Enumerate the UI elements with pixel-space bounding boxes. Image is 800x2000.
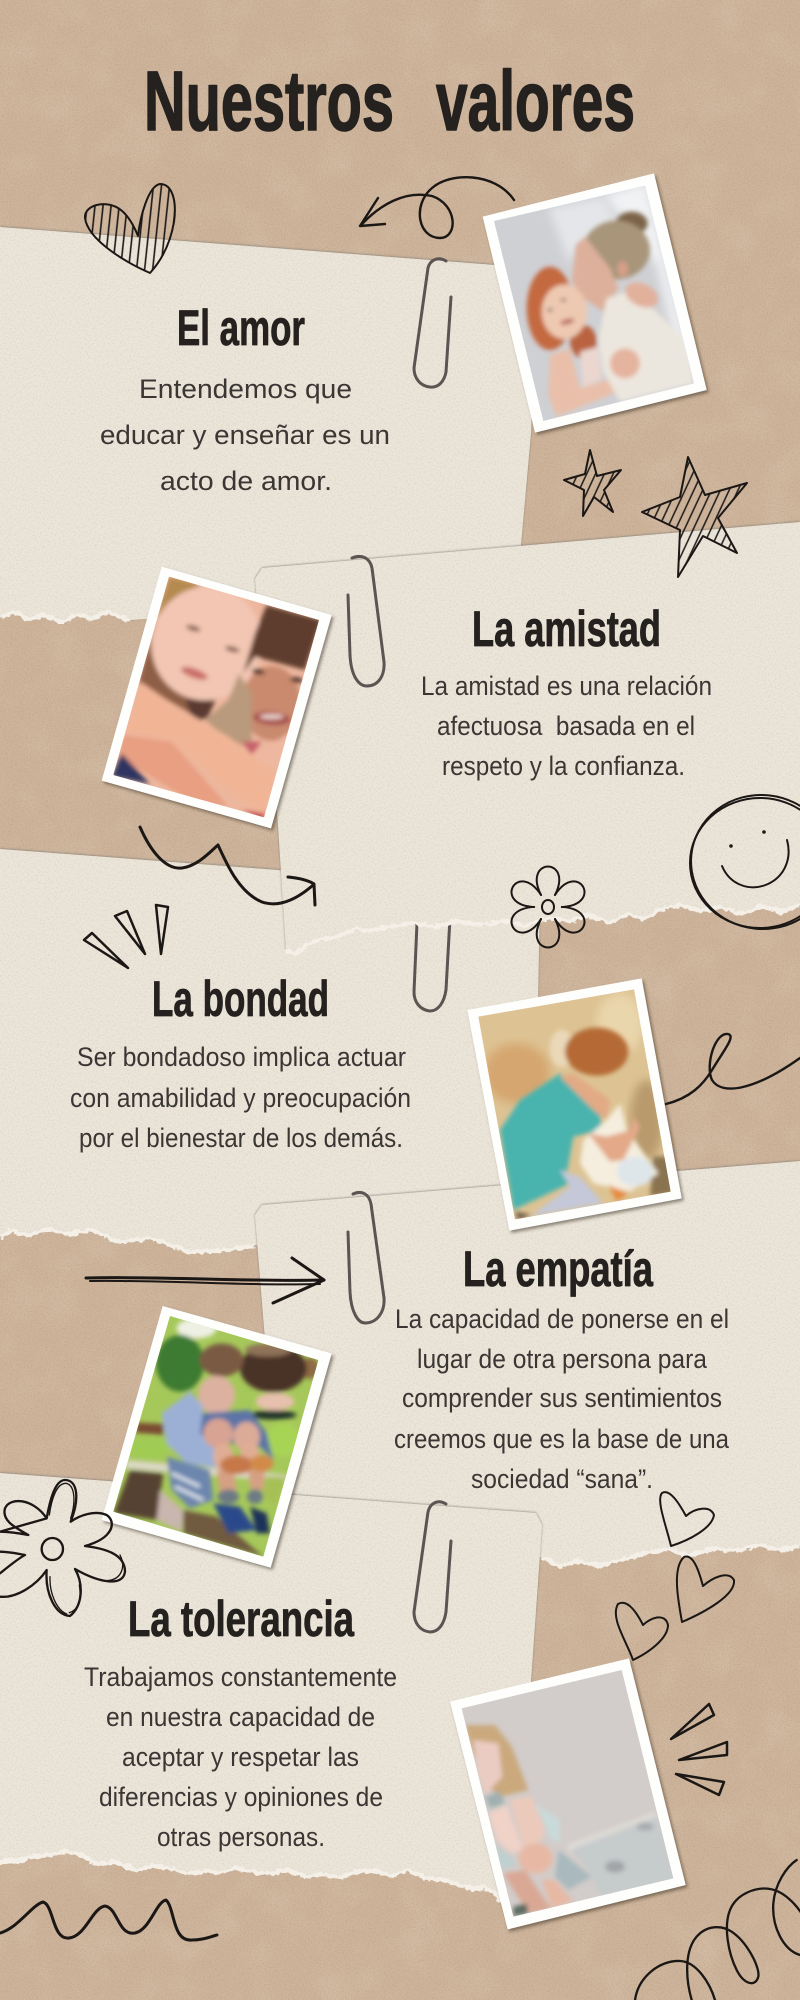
- icon: outline heart lower: [616, 1603, 668, 1660]
- text: la amistad: afectuosa basada en el: [437, 711, 695, 741]
- text: la tolerancia: Trabajamos constantemente: [84, 1662, 397, 1692]
- panel: el amor: [0, 227, 537, 700]
- icon: small star: [564, 450, 621, 516]
- text: la tolerancia: en nuestra capacidad de: [106, 1702, 375, 1732]
- icon: paperclip: [414, 900, 451, 1011]
- arrow: straight pointing to clip: [86, 1258, 324, 1303]
- panel: la empatía: [255, 1161, 800, 1600]
- text: el amor: acto de amor.: [160, 466, 332, 496]
- icon: paperclip: [414, 259, 451, 387]
- photo: children embracing in a field: [467, 978, 682, 1231]
- text: la tolerancia: aceptar y respetar las: [122, 1742, 359, 1772]
- title: Nuestros: [144, 54, 394, 148]
- icon: spikes: [84, 905, 168, 968]
- text: la tolerancia: diferencias y opiniones de: [99, 1782, 383, 1812]
- icon: outline heart middle: [677, 1557, 734, 1622]
- text: la empatía: creemos que es la base de una: [394, 1424, 730, 1454]
- text: la tolerancia: otras personas.: [157, 1822, 325, 1852]
- panel: la tolerancia: [0, 1473, 542, 1905]
- icon: large flower: [0, 1480, 125, 1616]
- text: la bondad: Ser bondadoso implica actuar: [77, 1042, 406, 1072]
- text: la empatía: comprender sus sentimientos: [402, 1383, 722, 1413]
- panel: la amistad: [255, 522, 800, 954]
- icon: curl line: [666, 1034, 800, 1104]
- text: la empatía: La capacidad de ponerse en el: [395, 1304, 729, 1334]
- icon: wave line: [0, 1900, 217, 1940]
- icon: spikes lower right: [671, 1704, 727, 1795]
- heading: el amor: El amor: [177, 300, 305, 356]
- text: la tolerancia: [84, 1662, 397, 1852]
- text: el amor: [100, 374, 390, 496]
- icon: paperclip: [348, 556, 384, 686]
- icon: scribbled heart: [85, 184, 175, 273]
- icon: spiral line: [635, 1860, 800, 2000]
- title: valores: [436, 54, 635, 148]
- text: la bondad: por el bienestar de los demás.: [79, 1123, 403, 1153]
- heading: la empatía: La empatía: [463, 1241, 654, 1297]
- icon: smiley face: [684, 788, 800, 936]
- heading: la bondad: La bondad: [152, 971, 329, 1027]
- text: la bondad: con amabilidad y preocupación: [70, 1083, 411, 1113]
- photo: boy sitting with girl: [102, 1306, 332, 1568]
- text: la empatía: [394, 1304, 730, 1494]
- text: la empatía: lugar de otra persona para: [417, 1344, 708, 1374]
- panel: la bondad: [0, 849, 540, 1260]
- text: la amistad: [421, 671, 712, 781]
- icon: small flower: [507, 866, 589, 948]
- photo: two girls hugging: [102, 567, 332, 828]
- text: la empatía: sociedad “sana”.: [471, 1464, 653, 1494]
- text: la amistad: respeto y la confianza.: [442, 751, 685, 781]
- icon: large star: [642, 457, 747, 577]
- icon: paperclip: [414, 1502, 451, 1632]
- arrow: squiggle pointing right: [140, 827, 315, 905]
- text: la amistad: La amistad es una relación: [421, 671, 712, 701]
- text: el amor: educar y enseñar es un: [100, 420, 390, 450]
- heading: la amistad: La amistad: [472, 601, 661, 657]
- heading: la tolerancia: La tolerancia: [128, 1591, 355, 1647]
- arrow: curl pointing left: [360, 177, 514, 238]
- icon: paperclip: [348, 1192, 384, 1323]
- photo: sad girl sitting: [450, 1658, 686, 1929]
- text: la bondad: [70, 1042, 411, 1153]
- photo: mother kissing daughter: [483, 173, 707, 433]
- icon: outline heart top: [660, 1492, 714, 1546]
- text: el amor: Entendemos que: [139, 374, 352, 404]
